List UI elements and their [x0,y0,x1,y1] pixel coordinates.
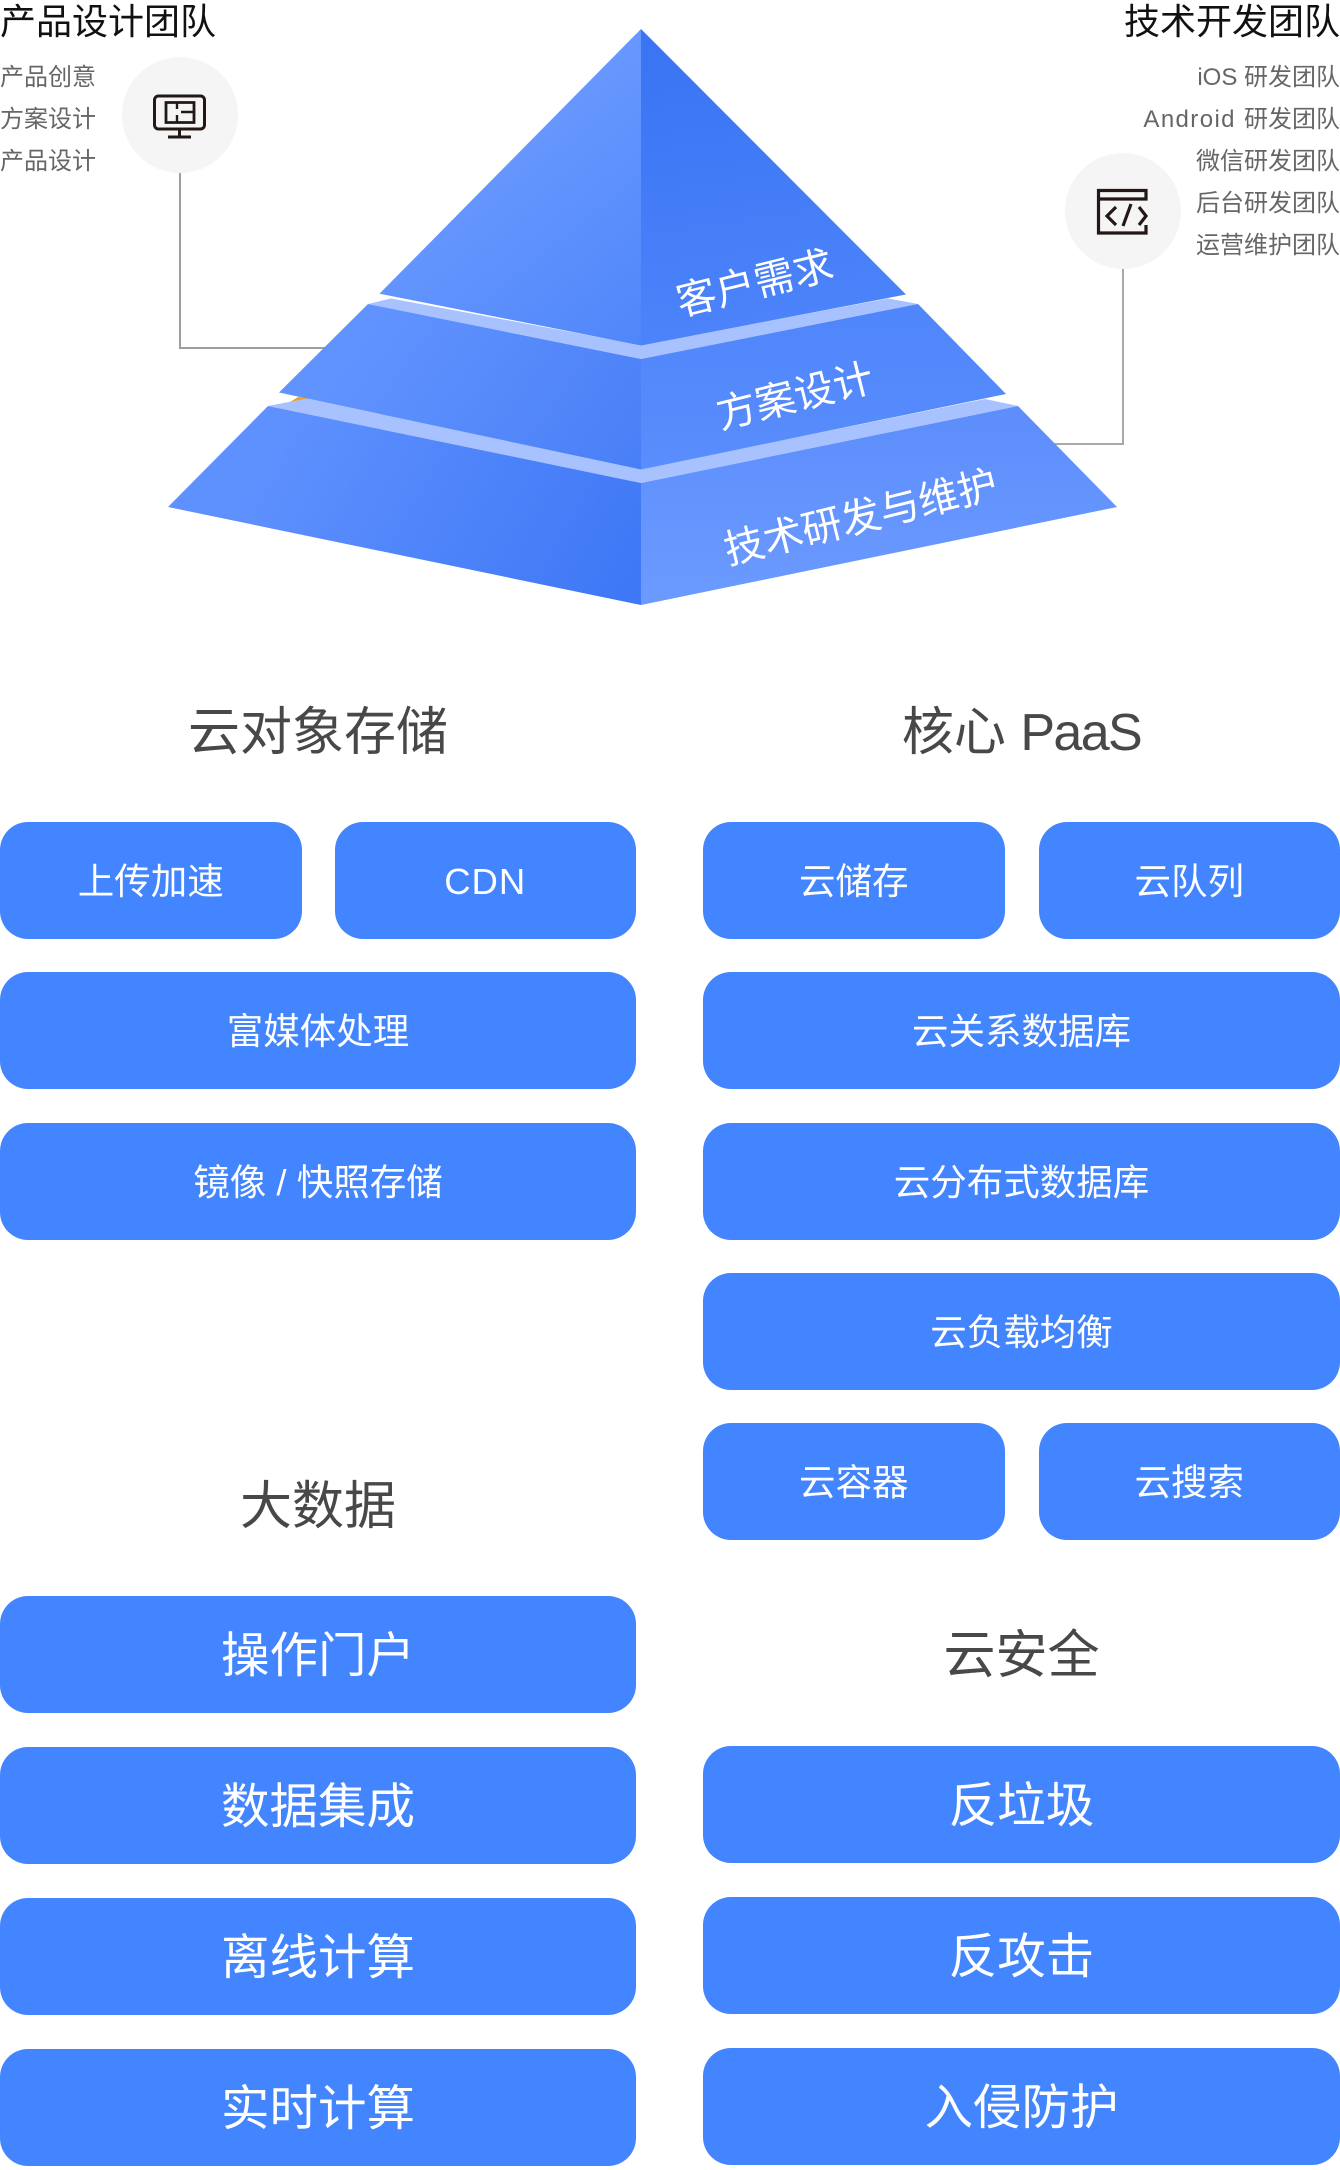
orange sliver [290,397,310,404]
button: 云关系数据库 [912,1011,1131,1052]
panel: core PaaS [703,704,1340,1540]
button: 操作门户 [221,1629,415,1683]
list: product design items: 产品设计 [0,148,96,175]
button: 云分布式数据库 [894,1162,1149,1203]
connector: tech team [1040,269,1123,444]
button: 云负载均衡 [930,1312,1113,1353]
list: product design items: 产品创意 [0,64,96,91]
light band lower [268,398,1018,483]
button [0,1747,636,1864]
button: 上传加速 [78,861,224,902]
list: tech team items [1143,64,1340,259]
button [703,822,1004,939]
list: tech team items: 运营维护团队 [1196,232,1340,259]
list: tech team items: Android 研发团队 [1143,106,1340,133]
button [703,1273,1340,1390]
heading: 云对象存储 [188,704,448,762]
button [0,2049,636,2166]
button: 镜像 / 快照存储 [193,1162,443,1203]
heading: 云安全 [943,1626,1100,1684]
list: tech team items: 后台研发团队 [1196,190,1340,217]
pyramid tier: bottom: 技术研发与维护 [720,463,1002,573]
button: 反攻击 [949,1930,1094,1984]
button [0,1596,636,1713]
button: 云搜索 [1134,1462,1244,1503]
pyramid tier: top: 客户需求 [672,243,838,325]
icon: code window [1065,153,1181,269]
button: CDN [444,861,526,902]
heading: tech team: 技术开发团队 [1124,1,1340,42]
heading: 大数据 [240,1478,396,1536]
list: product design items [0,64,96,175]
button [0,1898,636,2015]
button [0,972,636,1089]
button: 云队列 [1134,861,1244,902]
pyramid tier: middle: 方案设计 [712,356,878,438]
button [703,1123,1340,1240]
list: product design items: 方案设计 [0,106,96,133]
button: 云储存 [799,861,908,902]
panel: cloud security [703,1626,1340,2165]
button [703,972,1340,1089]
list: tech team items: 微信研发团队 [1196,148,1340,175]
button [1038,822,1340,939]
heading: 核心 PaaS [902,704,1141,762]
button [0,822,302,939]
button: 反垃圾 [949,1779,1094,1833]
panel: cloud object storage [0,704,636,1240]
panel: big data [0,1478,636,2166]
pyramid tier: middle [279,304,1006,470]
button: 离线计算 [221,1931,415,1985]
button [0,1123,636,1240]
button: 云容器 [799,1462,908,1503]
button: 数据集成 [221,1780,415,1834]
icon: product design monitor [122,57,238,173]
connector: product team [180,172,340,348]
list: tech team items: iOS 研发团队 [1197,64,1340,91]
button [334,822,636,939]
pyramid tier: bottom [168,406,1117,605]
button: 入侵防护 [924,2081,1118,2135]
pyramid tier: top [380,29,906,346]
button [703,1746,1340,1863]
pyramid diagram with connectors and icons [122,29,1181,605]
button: 实时计算 [221,2082,415,2136]
button: 富媒体处理 [227,1011,409,1052]
button [703,1423,1004,1540]
light band upper [368,298,918,359]
button [1038,1423,1340,1540]
heading: product design team: 产品设计团队 [0,1,216,42]
button [703,2048,1340,2165]
button [703,1897,1340,2014]
